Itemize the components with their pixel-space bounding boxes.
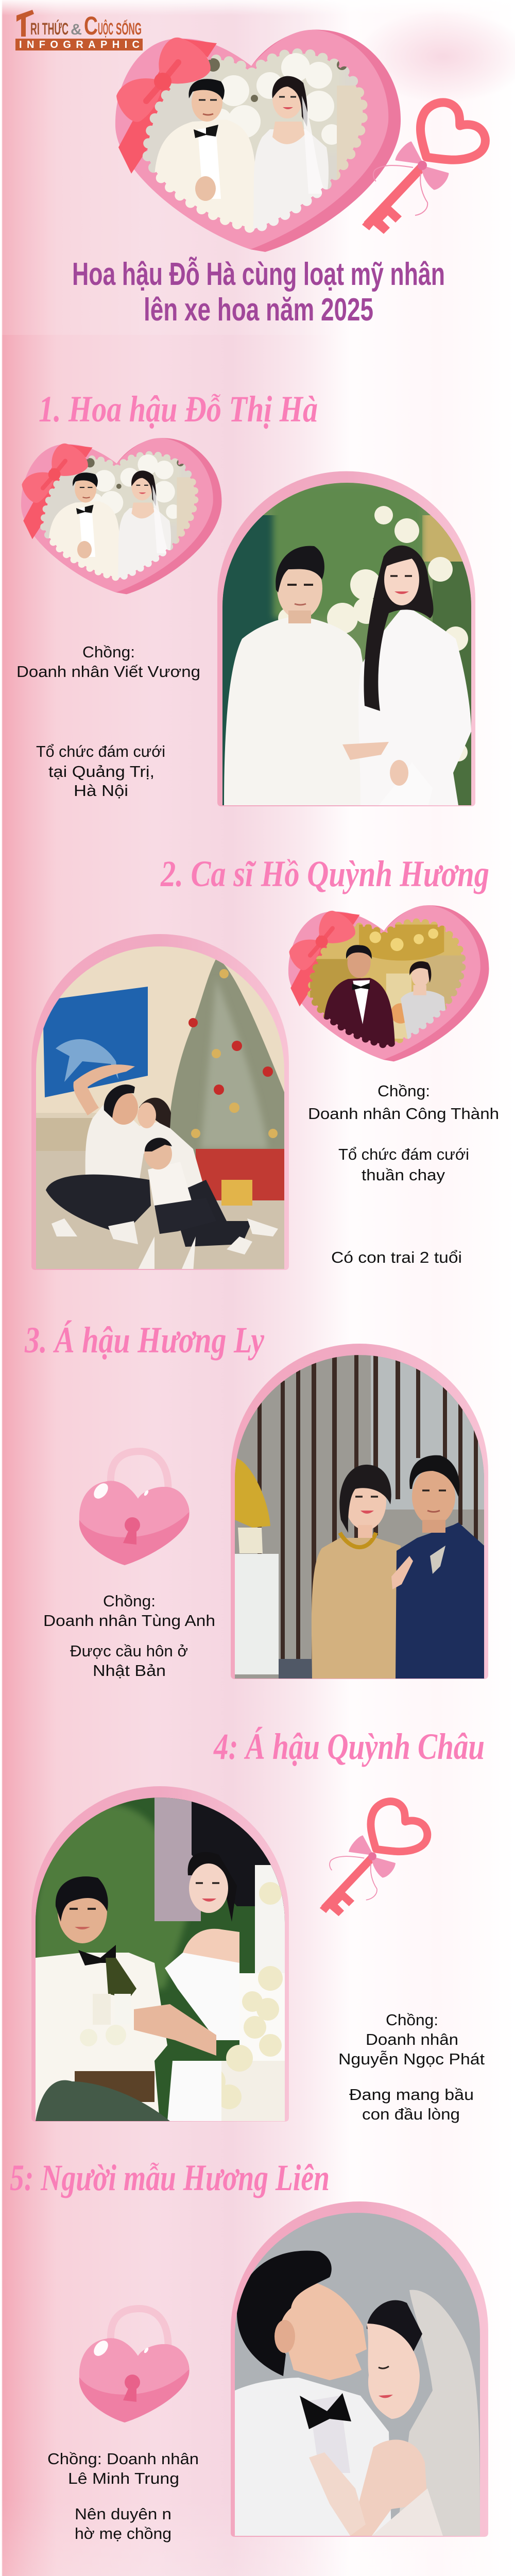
photo frame 1: Do Thi Ha <box>217 471 475 809</box>
text: mother-in-law: hờ mẹ chồng <box>75 2524 171 2543</box>
text: husband 2: Doanh nhân Công Thành <box>308 1105 499 1123</box>
icon: heart lock 1 <box>79 1451 190 1565</box>
text: husband 5: Chồng: Doanh nhân <box>47 2450 199 2468</box>
text: mother-in-law <box>75 2505 171 2543</box>
heart with Ho Quynh Huong couple photo <box>288 905 489 1061</box>
text: vegan wedding: thuần chay <box>362 1166 445 1184</box>
text: vegan wedding <box>338 1145 469 1184</box>
text: proposal <box>70 1642 188 1680</box>
text: husband 1: Doanh nhân Viết Vương <box>16 663 200 681</box>
text: husband 2: Chồng: <box>377 1082 430 1100</box>
text: husband 2 <box>308 1082 499 1123</box>
photo frame 3: Huong Ly couple <box>231 1344 488 1680</box>
photo frame 4: champagne <box>31 1786 289 2122</box>
text: husband 3 <box>43 1592 215 1630</box>
logo: header: & <box>71 21 82 38</box>
text: husband 5 <box>47 2450 199 2487</box>
text: son: Có con trai 2 tuổi <box>331 1248 462 1266</box>
text: husband 3: Doanh nhân Tùng Anh <box>43 1612 215 1630</box>
text: husband 1 <box>16 643 200 681</box>
heading 1: 1. Hoa hậu Đỗ Thị Hà <box>39 388 318 430</box>
text: husband 5: Lê Minh Trung <box>68 2469 179 2487</box>
text: proposal: Được cầu hôn ở <box>70 1642 188 1660</box>
icon: heart key top <box>362 103 485 234</box>
text: husband 1: Chồng: <box>82 643 135 661</box>
text: husband 4: Nguyễn Ngọc Phát <box>338 2050 485 2068</box>
photo frame 5: kiss <box>231 2201 488 2537</box>
logo: header: RI THỨC <box>30 20 68 38</box>
text: proposal: Nhật Bản <box>93 1662 166 1680</box>
main heart with couple photo <box>115 29 401 252</box>
text: husband 4: Chồng: <box>386 2011 438 2029</box>
text: wedding place 1 <box>36 742 165 800</box>
logo: header: UỘC <box>98 20 113 38</box>
text: pregnancy: Đang mang bầu <box>349 2086 474 2104</box>
text: husband 4 <box>338 2011 485 2068</box>
text: vegan wedding: Tổ chức đám cưới <box>338 1145 469 1163</box>
text: pregnancy: con đầu lòng <box>362 2105 460 2123</box>
text: husband 4: Doanh nhân <box>366 2030 458 2048</box>
text: wedding place 1: Hà Nội <box>74 782 128 800</box>
small heart with couple photo <box>21 437 222 594</box>
logo: header: SỐNG <box>116 20 142 38</box>
icon: heart lock 5 <box>79 2309 190 2422</box>
heading 5: 5: Người mẫu Hương Liên <box>10 2157 330 2198</box>
title <box>72 257 445 328</box>
text: pregnancy <box>349 2086 474 2123</box>
logo: header <box>15 10 143 50</box>
photo frame 2: family by Christmas tree <box>31 934 289 1273</box>
text: wedding place 1: tại Quảng Trị, <box>48 762 154 781</box>
title: lên xe hoa năm 2025 <box>144 292 373 328</box>
logo: header: C <box>84 11 98 40</box>
logo: header: INFOGRAPHIC <box>19 39 140 50</box>
text: wedding place 1: Tổ chức đám cưới <box>36 742 165 760</box>
text: husband 3: Chồng: <box>103 1592 156 1610</box>
icon: heart key 4 <box>320 1801 427 1916</box>
heading 3: 3. Á hậu Hương Ly <box>24 1319 265 1361</box>
text: mother-in-law: Nên duyên n <box>75 2505 171 2523</box>
